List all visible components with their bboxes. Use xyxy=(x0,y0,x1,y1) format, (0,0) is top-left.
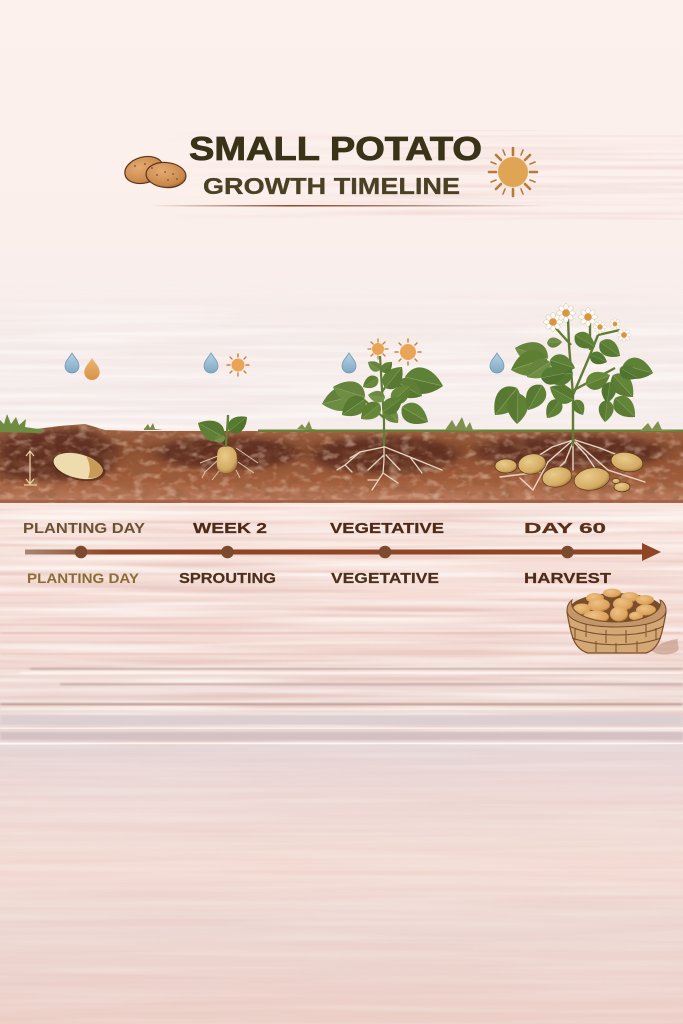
upper labels: WEEK 2 xyxy=(193,520,267,537)
sprout stem and leaves xyxy=(193,411,252,447)
lower labels: SPROUTING xyxy=(179,571,276,587)
roots xyxy=(337,445,442,490)
icon: sun xyxy=(489,148,537,196)
basket weave xyxy=(569,622,664,653)
lower labels: PLANTING DAY xyxy=(27,570,140,586)
upper labels: DAY 60 xyxy=(524,520,606,537)
foliage xyxy=(486,328,656,424)
icon: small sun xyxy=(368,339,388,359)
milestone dots xyxy=(75,546,574,558)
stage 3: vegetative xyxy=(319,339,446,490)
upper labels: VEGETATIVE xyxy=(330,520,444,537)
lower labels xyxy=(27,570,611,587)
ground grass line xyxy=(0,414,683,433)
seed potato in soil xyxy=(50,448,108,486)
icon: water drop xyxy=(342,353,356,373)
dark soil patches xyxy=(0,428,665,480)
tubers xyxy=(495,450,644,493)
title: small potato: SMALL POTATO xyxy=(189,130,482,167)
title block xyxy=(122,130,550,206)
foliage xyxy=(319,358,446,431)
upper labels xyxy=(23,520,606,537)
sprouting tuber xyxy=(217,446,237,473)
sprout roots xyxy=(200,448,258,480)
flowers xyxy=(544,304,631,342)
upper labels: PLANTING DAY xyxy=(23,520,145,537)
icon: larger sun xyxy=(395,339,421,365)
timeline xyxy=(23,520,661,587)
subtitle: growth timeline: GROWTH TIMELINE xyxy=(203,173,460,199)
stage 4: harvest plant xyxy=(486,304,656,493)
icon: water drop xyxy=(204,353,218,373)
depth arrow xyxy=(24,451,37,485)
stage 2: sprouting xyxy=(193,353,258,480)
basket body xyxy=(567,612,666,653)
stem xyxy=(545,318,620,446)
soil cross-section xyxy=(0,424,683,504)
icon: blue water drop xyxy=(65,353,79,373)
roots xyxy=(500,440,645,490)
soil grain texture xyxy=(0,424,683,504)
icon: small sun xyxy=(227,354,249,376)
basket of potatoes xyxy=(567,588,679,654)
potatoes in basket xyxy=(569,588,663,627)
stage 1: planting xyxy=(24,353,108,486)
title underline xyxy=(150,205,550,206)
basket rim xyxy=(567,600,666,627)
lower labels: HARVEST xyxy=(524,571,611,587)
lower labels: VEGETATIVE xyxy=(331,571,439,587)
ground scatter xyxy=(650,639,679,654)
stem xyxy=(362,356,410,446)
icon: two potatoes xyxy=(122,152,187,189)
arrow axis xyxy=(25,543,661,561)
icon: water drop xyxy=(490,353,504,373)
icon: orange water drop xyxy=(84,358,100,380)
